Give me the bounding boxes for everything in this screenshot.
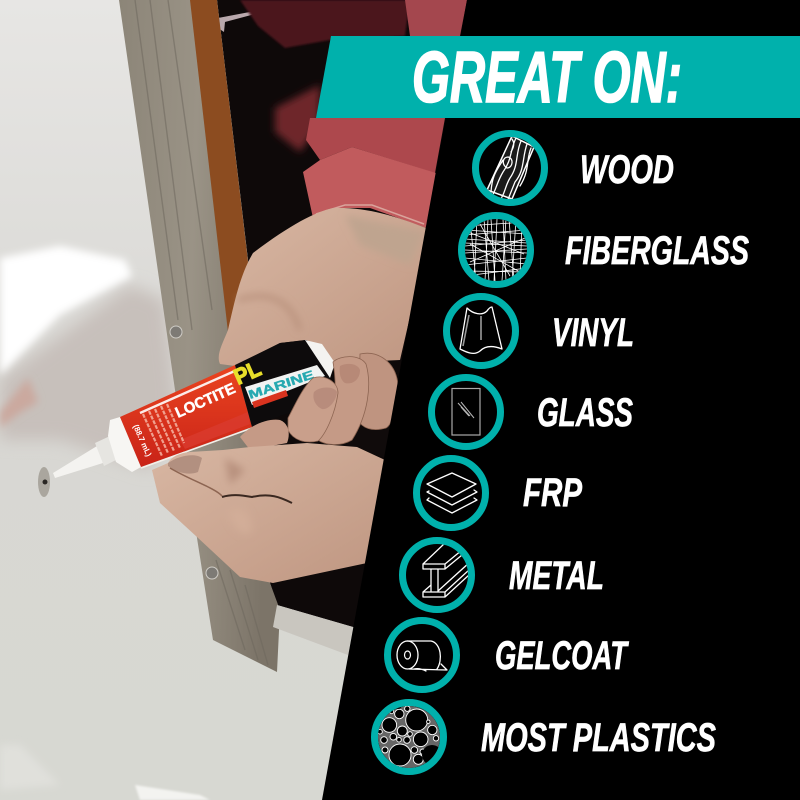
shirt top dark bbox=[240, 0, 410, 48]
fine print bbox=[143, 404, 184, 456]
palm light bbox=[228, 509, 252, 534]
hand crease bbox=[238, 296, 300, 330]
lower hand bbox=[152, 443, 385, 583]
wall highlight bbox=[0, 246, 132, 375]
nozzle bbox=[53, 446, 103, 478]
gap between fingers bbox=[340, 390, 400, 462]
finger pad under tube bbox=[240, 420, 289, 450]
dark gap behind post bbox=[217, 0, 480, 640]
shirt upper sleeve bbox=[306, 118, 445, 173]
heading: GREAT ON: bbox=[412, 38, 682, 118]
boat wall bbox=[0, 0, 480, 800]
shirt cuff bbox=[303, 147, 436, 228]
label: WOOD bbox=[580, 148, 674, 192]
tube shoulder bbox=[108, 417, 141, 472]
nail one bbox=[313, 388, 337, 409]
cap end bbox=[305, 340, 335, 378]
icon: stacked layers bbox=[416, 458, 486, 528]
item: wood bbox=[476, 134, 674, 202]
item: glass bbox=[432, 378, 633, 446]
post brown edge bbox=[190, 0, 248, 332]
hole in wall bbox=[38, 467, 50, 497]
wall shadow below highlight bbox=[0, 285, 176, 470]
PL text: PL bbox=[230, 356, 265, 390]
tube white lower edge bbox=[141, 428, 252, 468]
label: VINYL bbox=[552, 311, 634, 355]
item: fiberglass bbox=[462, 216, 749, 284]
nozzle threads bbox=[95, 436, 116, 466]
lower boat lip bbox=[273, 605, 353, 655]
icon: roll bbox=[388, 620, 456, 690]
item: most plastics bbox=[374, 701, 716, 772]
tube highlight bbox=[140, 370, 237, 413]
icon: wood plank bbox=[476, 134, 544, 202]
thumb underside crease bbox=[170, 468, 222, 496]
finger three bbox=[358, 353, 398, 430]
reflected tube ghost bbox=[0, 378, 38, 428]
item: vinyl bbox=[446, 296, 634, 366]
label: METAL bbox=[509, 554, 604, 598]
fast cure strip bbox=[252, 390, 288, 408]
thumb shading bbox=[225, 458, 245, 485]
palm crease bbox=[222, 495, 292, 503]
icon: bubbles bbox=[374, 701, 444, 772]
tube lower reflection bbox=[180, 412, 250, 449]
post grain bbox=[135, 0, 268, 665]
lower-left glare bbox=[0, 745, 60, 790]
finger one bbox=[288, 377, 338, 442]
photo: hands applying sealant tube bbox=[0, 0, 480, 800]
label: FRP bbox=[523, 471, 582, 515]
title banner bbox=[316, 36, 800, 118]
icon: glass pane bbox=[432, 378, 500, 446]
label: GLASS bbox=[537, 391, 633, 435]
label: MOST PLASTICS bbox=[481, 716, 716, 760]
shirt top bright bbox=[405, 0, 467, 36]
nail two bbox=[340, 364, 360, 383]
marine text: MARINE bbox=[247, 368, 316, 402]
cuff stitching bbox=[316, 205, 424, 224]
icon: I-beam bbox=[402, 540, 472, 610]
screw heads bbox=[170, 326, 182, 338]
label: GELCOAT bbox=[495, 634, 629, 678]
thumb nail bbox=[168, 455, 202, 474]
shirt shadow fold bbox=[275, 85, 320, 152]
item: frp bbox=[416, 458, 582, 528]
tube black body bbox=[235, 340, 330, 427]
volume: (88.7 mL) bbox=[131, 423, 153, 458]
upper hand bbox=[219, 208, 430, 366]
item: gelcoat bbox=[388, 620, 629, 690]
marine label bbox=[245, 365, 325, 405]
black panel bbox=[322, 0, 800, 800]
item: metal bbox=[402, 540, 604, 610]
wrist shading bbox=[345, 215, 425, 265]
wooden post bbox=[119, 0, 280, 672]
tube red body bbox=[120, 365, 252, 467]
strap in gap bbox=[218, 11, 255, 32]
icon: vinyl sheet bbox=[446, 296, 516, 366]
bottom glare bbox=[135, 785, 210, 800]
brand: LOCTITE bbox=[173, 380, 238, 422]
icon: fiberglass mesh bbox=[462, 216, 530, 284]
finger two bbox=[318, 357, 369, 445]
